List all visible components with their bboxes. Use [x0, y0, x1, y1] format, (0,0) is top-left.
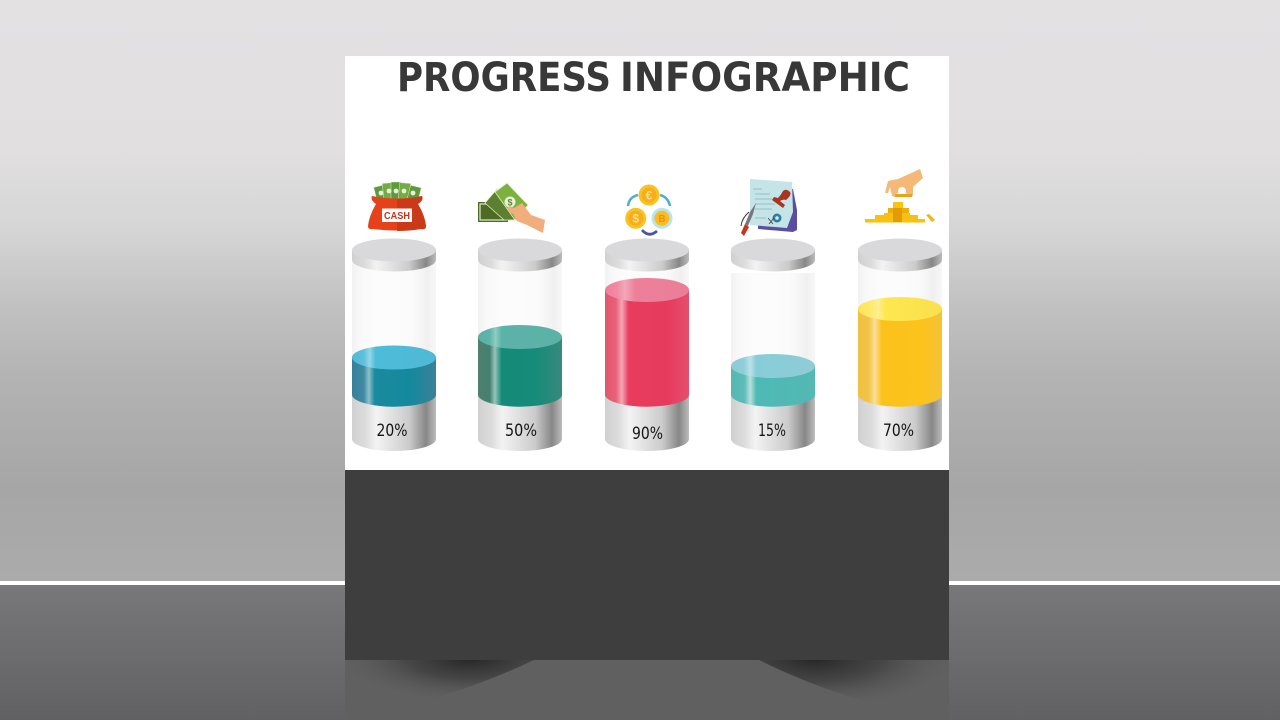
cylinder: 70% [858, 238, 942, 451]
cylinder: 70%: 70% [883, 421, 914, 441]
icon: currency exchange coins: B [658, 214, 666, 225]
cylinder: 20%: 20% [376, 421, 408, 441]
floor [0, 585, 1280, 720]
right panel shadow [759, 660, 949, 720]
white panel [345, 56, 949, 470]
cylinder: 15%: 15% [758, 421, 786, 441]
icon: currency exchange coins: € [646, 188, 653, 202]
left panel shadow [345, 660, 534, 720]
title: INFOGRAPHIC [620, 55, 910, 101]
cylinder: 20% [352, 238, 436, 451]
icon: cash bag: CASH [384, 210, 410, 222]
cylinder: 90%: 90% [632, 424, 663, 444]
title: PROGRESS [397, 55, 611, 101]
icon: currency exchange coins [625, 184, 672, 234]
icon: money in hand: $ [507, 198, 513, 208]
title [397, 55, 910, 101]
icon: currency exchange coins: $ [632, 212, 639, 226]
floor line [0, 581, 1280, 585]
icon: cash bag [368, 182, 426, 231]
icon: signed document [741, 179, 797, 236]
cylinder: 50% [478, 238, 562, 451]
dark panel [345, 470, 949, 660]
cylinder: 50%: 50% [505, 421, 537, 441]
cylinder: 90% [605, 238, 689, 451]
icon: money in hand [478, 183, 545, 233]
icon: hand placing coin on gold stack [865, 169, 935, 222]
floor reflection under panel [345, 660, 949, 720]
cylinder: 15% [731, 238, 815, 451]
